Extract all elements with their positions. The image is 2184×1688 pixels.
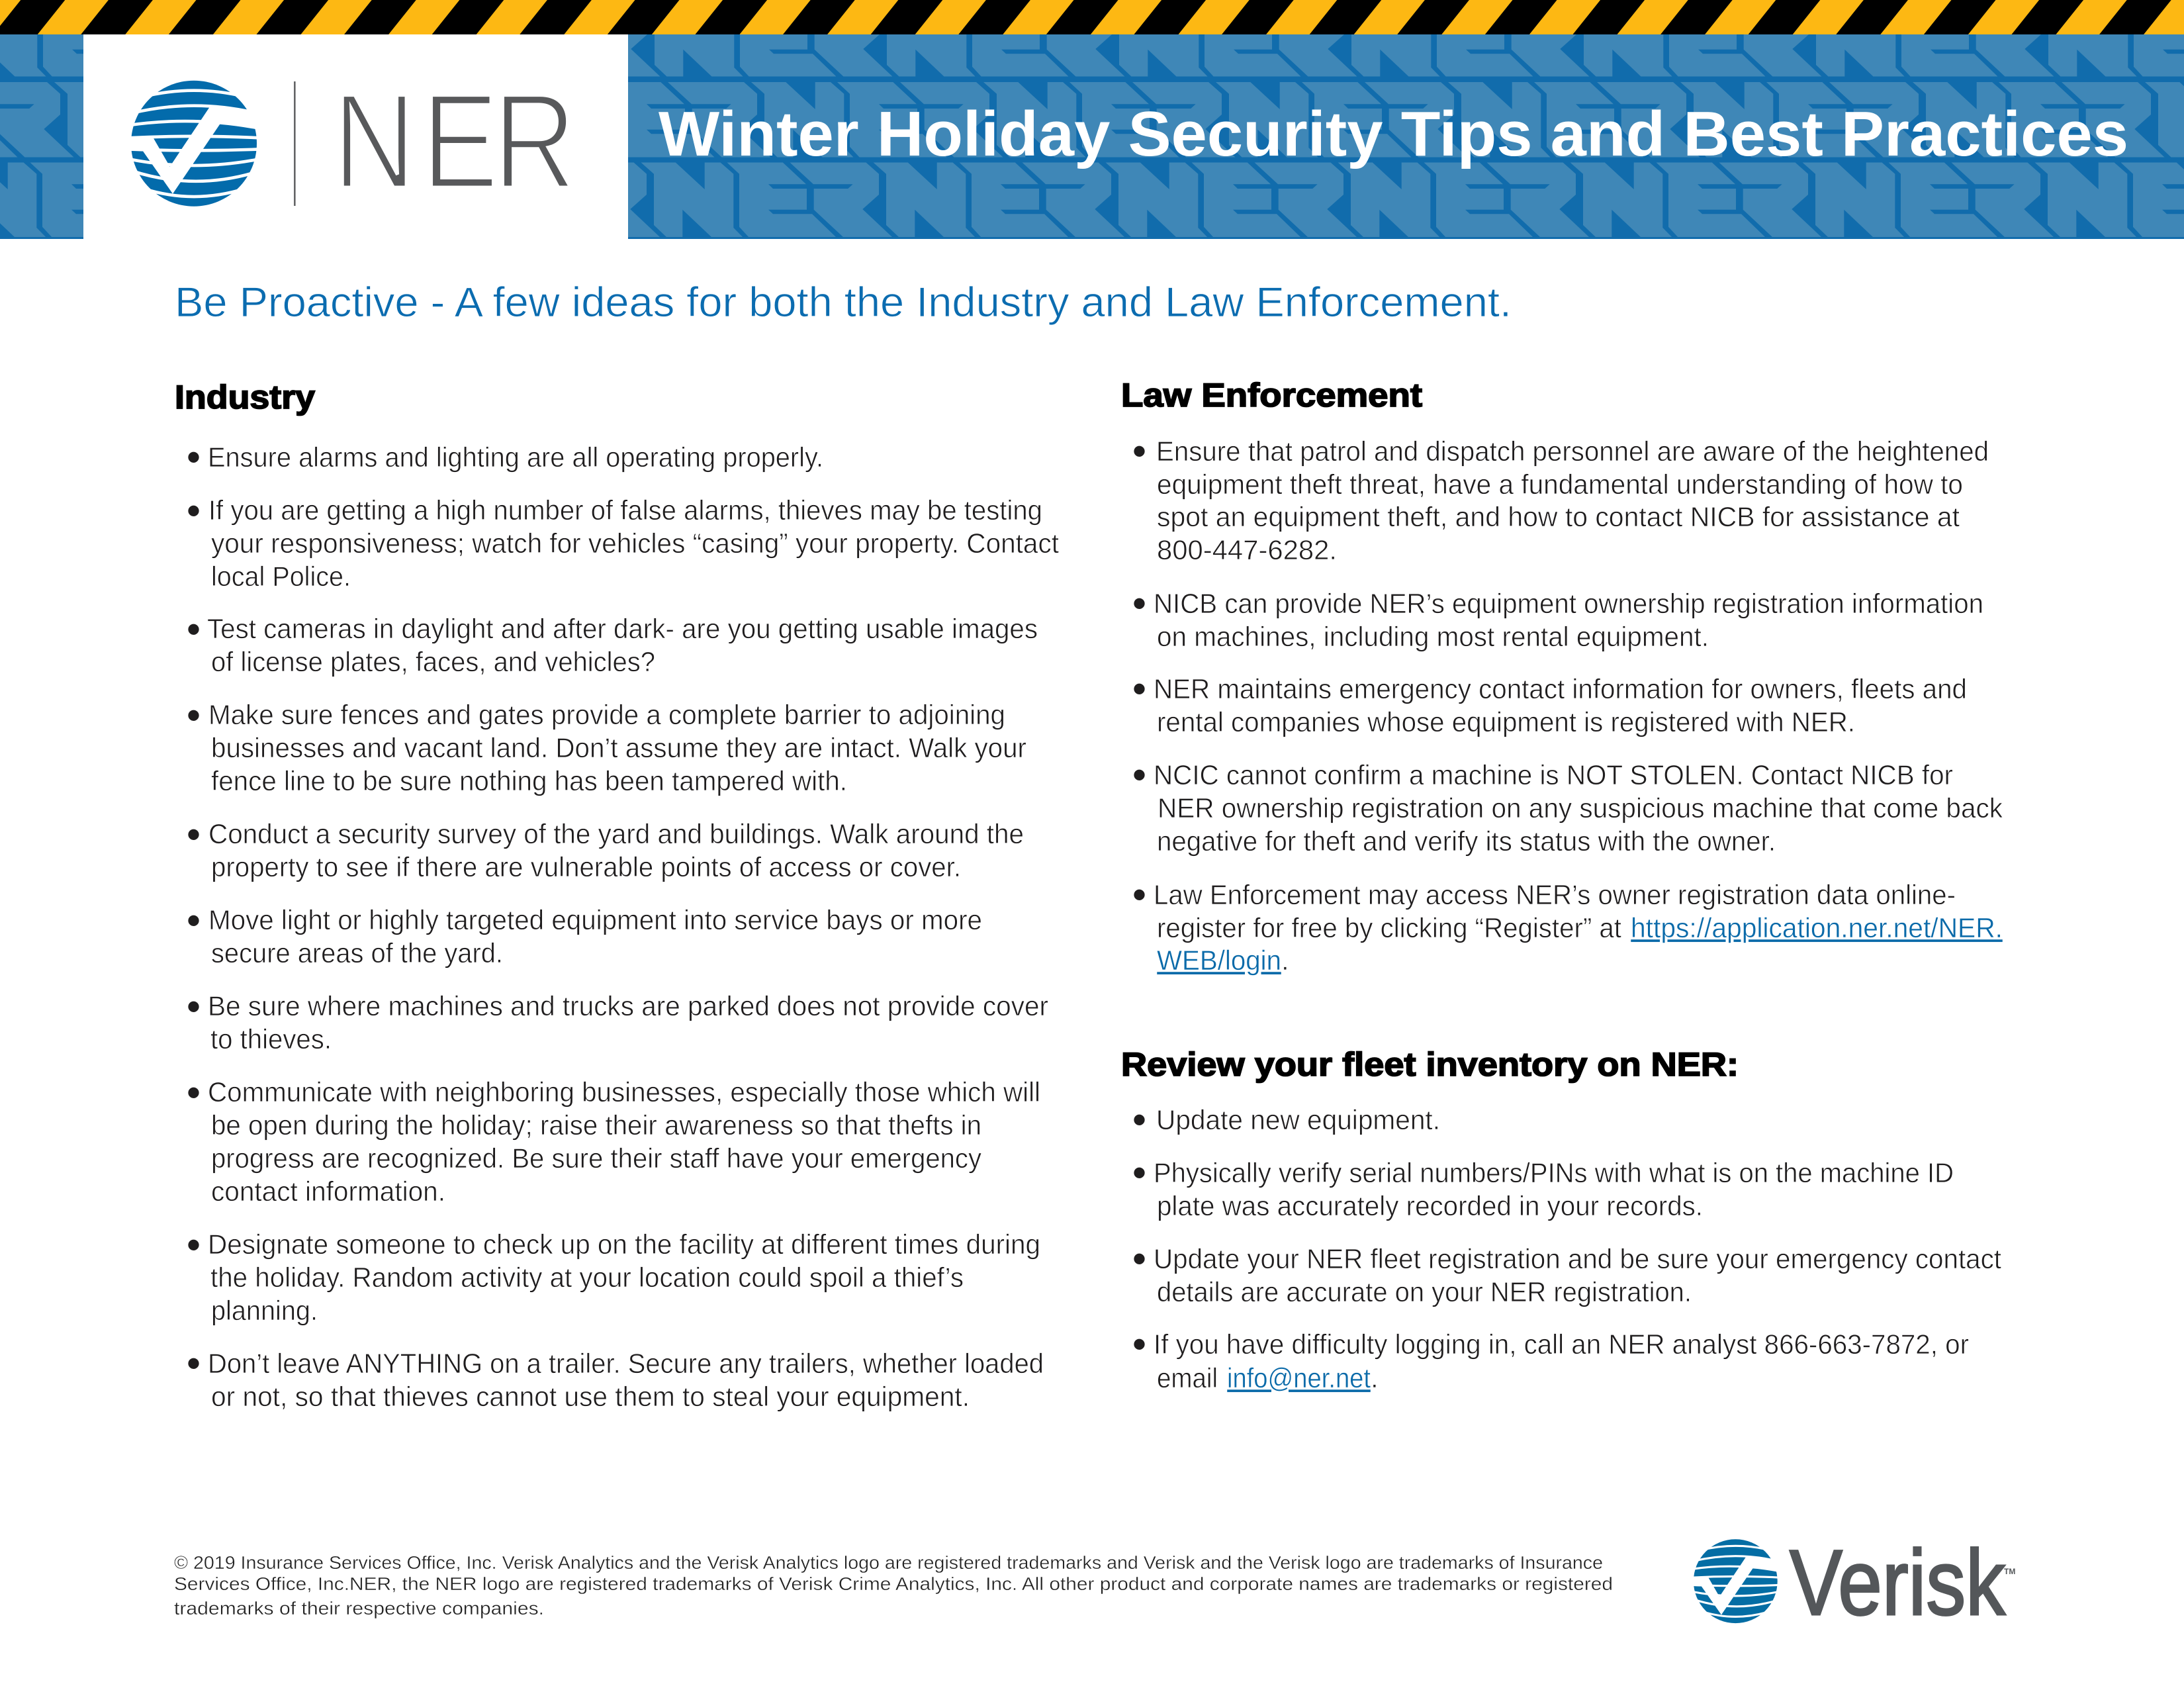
tip: move targeted equipment: [187, 898, 982, 968]
panel: Industry tips: [175, 379, 1059, 1412]
tip: neighboring businesses: Communicate with neighboring businesses, especially those which will: [208, 1076, 1040, 1107]
tip: designate someone: the holiday. Random activity at your location could spoil a thief’s: [210, 1262, 964, 1293]
tip: fences and gates: [187, 693, 1026, 796]
tip: designate someone: [187, 1223, 1040, 1326]
tip: NICB registration information: NICB can provide NER’s equipment ownership registration information: [1154, 588, 1983, 619]
tip: update fleet registration: •: [1132, 1237, 1146, 1281]
panel: Law Enforcement tips: [1121, 377, 2003, 976]
tip: emergency contact information: [1132, 667, 1967, 737]
tip: update fleet registration: Update your NER fleet registration and be sure your emergency contact: [1154, 1243, 2001, 1274]
trademark symbol: TM: [2004, 1567, 2015, 1576]
tip: patrol and dispatch awareness: 800-447-6282.: [1157, 534, 1337, 565]
tip: update new equipment: Update new equipment.: [1156, 1104, 1440, 1135]
tip: neighboring businesses: progress are recognized. Be sure their staff have your emergency: [211, 1143, 981, 1174]
tip: test cameras: [187, 607, 1038, 677]
tip: logging in help: If you have difficulty logging in, call an NER analyst 866-663-7872, or: [1154, 1329, 1969, 1360]
tip: neighboring businesses: contact information.: [211, 1176, 445, 1207]
tip: parked machines: Be sure where machines and trucks are parked does not provide cover: [208, 990, 1048, 1021]
tip: designate someone: planning.: [211, 1295, 318, 1326]
Verisk logo: [1692, 1530, 2015, 1634]
tip: parked machines: •: [187, 984, 201, 1029]
tip: test cameras: Test cameras in daylight and after dark- are you getting usable images: [207, 613, 1038, 644]
tip: fences and gates: businesses and vacant land. Don’t assume they are intact. Walk your: [211, 732, 1026, 763]
tip: NCIC cannot confirm: NER ownership registration on any suspicious machine that come back: [1158, 792, 2003, 823]
tip: neighboring businesses: be open during the holiday; raise their awareness so that thefts in: [211, 1109, 981, 1141]
tip: NICB registration information: [1132, 581, 1983, 652]
footer copyright text: © 2019 Insurance Services Office, Inc. Verisk Analytics and the Verisk Analytics logo are registered trademarks and Verisk and the Verisk logo are trademarks of Insurance: [174, 1552, 1603, 1573]
tip: logging in help: •: [1132, 1322, 1146, 1366]
tip: alarms and lighting: •: [187, 435, 201, 479]
tip: online registration: Law Enforcement may access NER’s owner registration data online-: [1154, 879, 1956, 910]
tip: online registration: [1132, 872, 2003, 976]
tip: parked machines: [187, 984, 1048, 1055]
tip: update fleet registration: [1132, 1237, 2001, 1307]
subtitle: Be Proactive - A few ideas for both the Industry and Law Enforcement.: [175, 279, 1512, 326]
tip: trailers: •: [187, 1341, 201, 1385]
tip: logging in help: .: [1371, 1362, 1379, 1393]
Verisk wordmark: Verisk: [1790, 1530, 2006, 1634]
tip: verify serial numbers: •: [1132, 1150, 1146, 1195]
tip: NICB registration information: •: [1132, 581, 1146, 626]
tip: security survey: [187, 812, 1024, 882]
tip: move targeted equipment: secure areas of the yard.: [211, 937, 503, 968]
tip: verify serial numbers: Physically verify serial numbers/PINs with what is on the machine ID: [1154, 1157, 1954, 1188]
tip: logging in help: info@ner.net: [1227, 1362, 1371, 1393]
icon: Verisk globe with check mark: [128, 81, 260, 207]
tip: false alarms: •: [187, 489, 201, 533]
tip: patrol and dispatch awareness: [1132, 429, 1989, 565]
tip: fences and gates: Make sure fences and gates provide a complete barrier to adjoining: [208, 699, 1005, 730]
tip: false alarms: your responsiveness; watch for vehicles “casing” your property. Contact: [211, 528, 1059, 559]
tip: test cameras: of license plates, faces, and vehicles?: [211, 646, 655, 677]
tip: NCIC cannot confirm: •: [1132, 753, 1146, 797]
tip: NCIC cannot confirm: NCIC cannot confirm a machine is NOT STOLEN. Contact NICB for: [1154, 759, 1953, 790]
tip: online registration: https://application.ner.net/NER.: [1631, 912, 2003, 943]
tip: patrol and dispatch awareness: equipment theft threat, have a fundamental understanding of how to: [1157, 469, 1963, 500]
NER logo panel: [83, 34, 628, 239]
tip: online registration: .: [1281, 945, 1289, 976]
tip: false alarms: local Police.: [211, 561, 351, 592]
tip: parked machines: to thieves.: [210, 1023, 332, 1055]
footer copyright text: [174, 1552, 1613, 1618]
tip: online registration: WEB/login: [1157, 945, 1281, 976]
tip: logging in help: [1132, 1322, 1969, 1393]
tip: security survey: Conduct a security survey of the yard and buildings. Walk around the: [208, 818, 1024, 849]
tip: patrol and dispatch awareness: •: [1132, 429, 1146, 473]
tip: trailers: Don’t leave ANYTHING on a trailer. Secure any trailers, whether loaded: [208, 1348, 1044, 1379]
footer copyright text: Services Office, Inc.NER, the NER logo are registered trademarks of Verisk Crime Analytics, Inc. All other product and corporate names are trademarks or registered: [174, 1573, 1613, 1594]
tip: verify serial numbers: [1132, 1150, 1954, 1221]
heading: Industry: Industry: [175, 379, 315, 416]
tip: patrol and dispatch awareness: spot an equipment theft, and how to contact NICB for assistance at: [1157, 501, 1960, 532]
tip: alarms and lighting: Ensure alarms and lighting are all operating properly.: [208, 442, 823, 473]
tip: fences and gates: fence line to be sure nothing has been tampered with.: [211, 765, 847, 796]
tip: NCIC cannot confirm: negative for theft and verify its status with the owner.: [1157, 825, 1776, 857]
icon: Verisk globe: [1692, 1539, 1780, 1623]
tip: designate someone: Designate someone to check up on the facility at different times during: [208, 1229, 1040, 1260]
panel: Review your fleet inventory: [1121, 1046, 2001, 1393]
tip: move targeted equipment: •: [187, 898, 201, 943]
tip: security survey: property to see if there are vulnerable points of access or cover.: [211, 851, 961, 882]
hazard stripe bar: [0, 0, 2184, 34]
heading: Review your fleet inventory on NER: Review your fleet inventory on NER:: [1121, 1046, 1739, 1083]
tip: trailers: or not, so that thieves cannot use them to steal your equipment.: [211, 1381, 970, 1412]
tip: update new equipment: [1132, 1098, 1440, 1142]
footer copyright text: trademarks of their respective companies.: [174, 1598, 544, 1618]
tip: move targeted equipment: Move light or highly targeted equipment into service bays or more: [208, 904, 982, 935]
title: Winter Holiday Security Tips and Best Practices: [659, 99, 2128, 169]
tip: designate someone: •: [187, 1223, 201, 1267]
tip: verify serial numbers: plate was accurately recorded in your records.: [1157, 1190, 1703, 1221]
heading: Law Enforcement: Law Enforcement: [1121, 377, 1422, 414]
tip: emergency contact information: rental companies whose equipment is registered with NER.: [1157, 706, 1855, 737]
tip: false alarms: If you are getting a high number of false alarms, thieves may be testing: [208, 494, 1042, 526]
tip: alarms and lighting: [187, 435, 823, 479]
tip: security survey: •: [187, 812, 201, 857]
tip: neighboring businesses: •: [187, 1070, 201, 1115]
NER wordmark: NER: [333, 66, 576, 217]
tip: update fleet registration: details are accurate on your NER registration.: [1157, 1276, 1692, 1307]
tip: neighboring businesses: [187, 1070, 1040, 1207]
tip: trailers: [187, 1341, 1044, 1412]
tip: NICB registration information: on machines, including most rental equipment.: [1157, 621, 1709, 652]
tip: logging in help: email: [1157, 1362, 1218, 1393]
tip: patrol and dispatch awareness: Ensure that patrol and dispatch personnel are aware of the heightened: [1156, 436, 1989, 467]
logo divider: [294, 81, 296, 206]
tip: NCIC cannot confirm: [1132, 753, 2003, 857]
tip: online registration: •: [1132, 872, 1146, 917]
tip: emergency contact information: •: [1132, 667, 1146, 711]
tip: test cameras: •: [187, 607, 201, 651]
tip: update new equipment: •: [1132, 1098, 1146, 1142]
tip: online registration: register for free by clicking “Register” at: [1157, 912, 1621, 943]
tip: fences and gates: •: [187, 693, 201, 737]
tip: false alarms: [187, 489, 1059, 592]
tip: emergency contact information: NER maintains emergency contact information for owners, fleets and: [1154, 673, 1967, 704]
header banner with patterned background: [0, 34, 2184, 239]
